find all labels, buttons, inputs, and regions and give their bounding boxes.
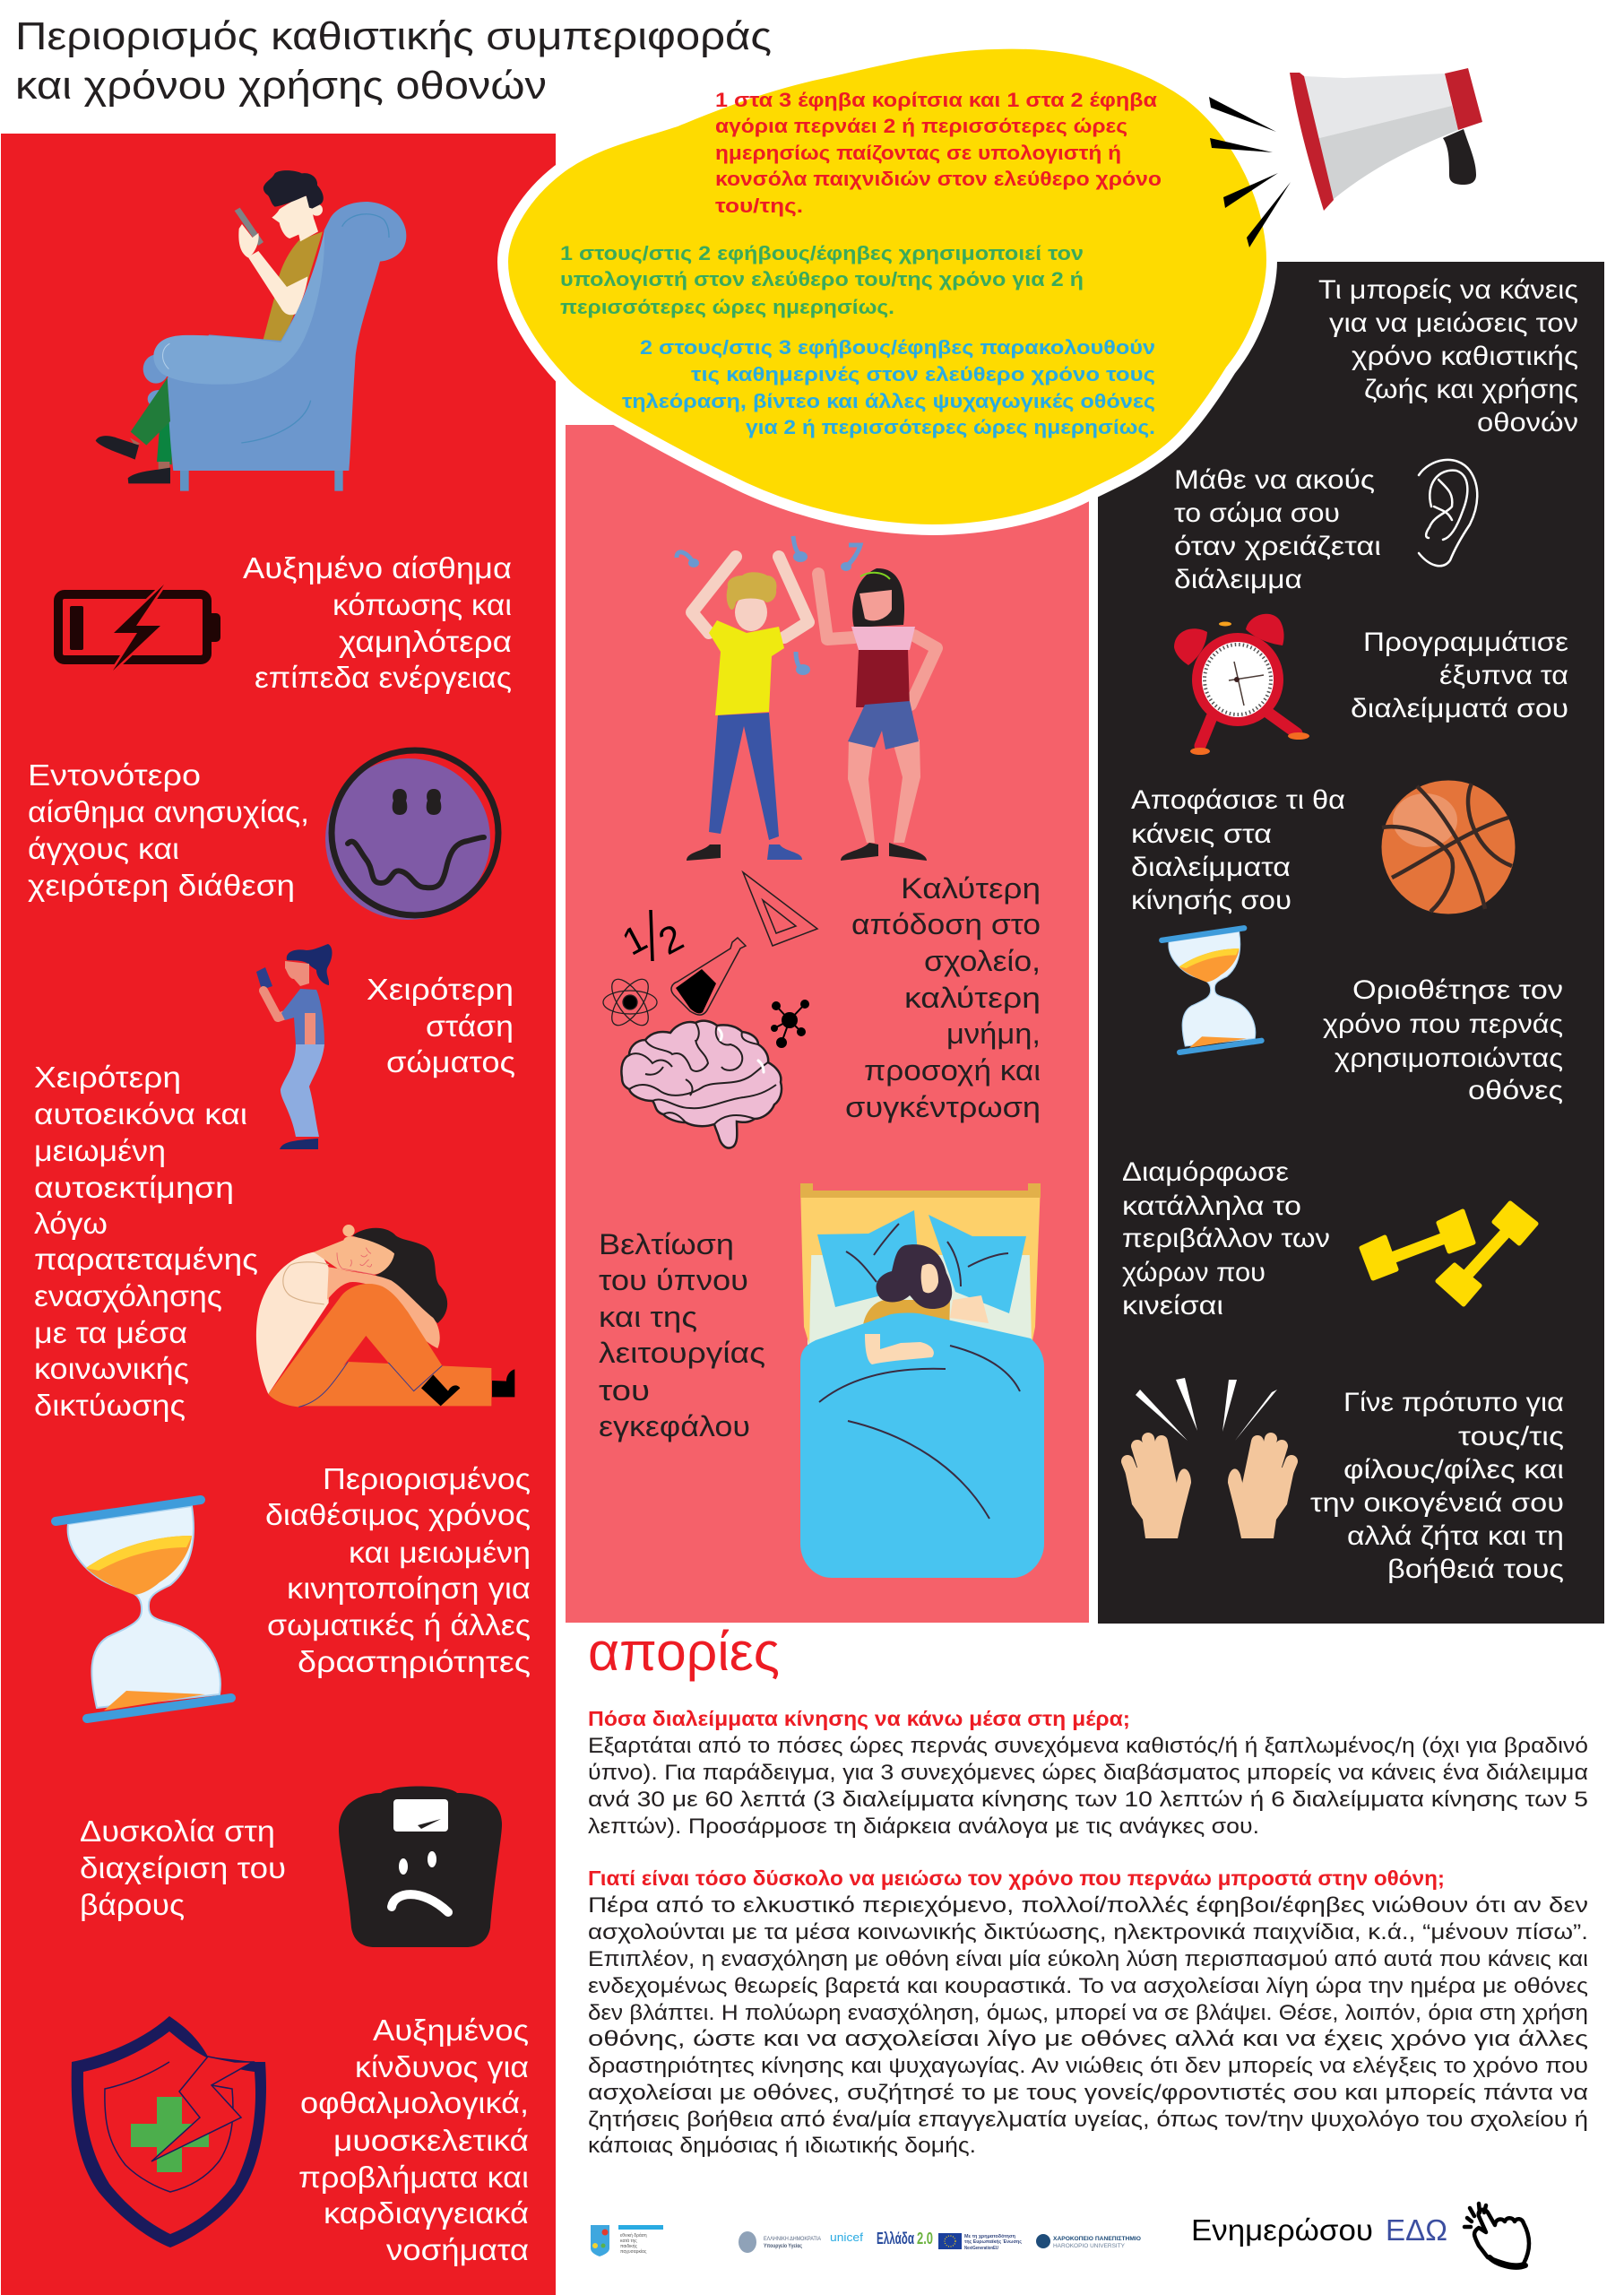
text: red stat: ημερησίως παίζοντας σε υπολογιστή ή bbox=[715, 142, 1121, 164]
icon: sad girl hugging knees bbox=[256, 1225, 514, 1407]
text: posture: Χειρότερη bbox=[367, 973, 514, 1006]
text: listen to body: διάλειμμα bbox=[1174, 565, 1302, 594]
icon: hourglass bbox=[56, 1500, 231, 1719]
text: school performance: προσοχή και bbox=[864, 1054, 1041, 1087]
text: posture: στάση bbox=[426, 1009, 514, 1043]
text: program breaks: Προγραμμάτισε bbox=[1363, 628, 1568, 657]
text: self image: λόγω bbox=[34, 1207, 108, 1240]
icon: sad bathroom scale bbox=[339, 1786, 502, 1947]
text: school performance bbox=[845, 872, 1041, 1123]
text: environment: κινείσαι bbox=[1122, 1291, 1223, 1321]
fraction one half: 1 bbox=[616, 916, 653, 964]
logo: European Union: της Ευρωπαϊκής Ένωσης bbox=[964, 2239, 1022, 2245]
icon: megaphone bbox=[1209, 68, 1482, 247]
logo: national action: εθνική δράση bbox=[620, 2232, 647, 2239]
text: self image: κοινωνικής bbox=[34, 1352, 189, 1385]
text: decide movement: Αποφάσισε τι θα bbox=[1131, 785, 1345, 815]
icon: low battery bbox=[58, 585, 220, 671]
text: fatigue: επίπεδα ενέργειας bbox=[255, 661, 512, 694]
text block: screen time question: ασχολούνται με τα μέσα κοινωνικής δικτύωσης, ηλεκτρονικά παιχνίδια, κ.ά., “μένουν πίσω”. bbox=[588, 1920, 1588, 1944]
text: anxiety: χειρότερη διάθεση bbox=[28, 869, 295, 902]
logo: European Union: Με τη χρηματοδότηση bbox=[964, 2234, 1016, 2239]
text: role model bbox=[1310, 1388, 1564, 1584]
text: decide movement bbox=[1131, 785, 1345, 915]
text: listen to body: το σώμα σου bbox=[1174, 498, 1340, 528]
text: green stat: υπολογιστή στον ελεύθερο του/της χρόνο για 2 ή bbox=[560, 268, 1084, 290]
text block: movement breaks question: ανά 30 με 60 λεπτά (3 διαλείμματα κίνησης των 10 λεπτών ή 6 διαλείμματα κίνησης των 5 bbox=[588, 1788, 1588, 1812]
text block: screen time question: ενδεχομένως θεωρείς βαρετά και κουραστικά. Το να ασχολείσαι λίγη ώρα την ημέρα με οθόνες bbox=[588, 1974, 1588, 1998]
text: school performance: καλύτερη bbox=[904, 982, 1041, 1014]
red panel background bbox=[1, 134, 556, 2295]
heading: questions: απορίες bbox=[588, 1622, 780, 1682]
icon: wobbly purple face bbox=[325, 750, 498, 920]
text: role model: βοήθειά τους bbox=[1387, 1555, 1564, 1584]
panel: what you can do bbox=[1098, 262, 1604, 1624]
text: school performance: σχολείο, bbox=[924, 945, 1041, 977]
text: anxiety: Εντονότερο bbox=[28, 758, 201, 792]
text: self image: με τα μέσα bbox=[34, 1316, 187, 1349]
text: school performance: απόδοση στο bbox=[851, 908, 1041, 940]
text: listen to body: όταν χρειάζεται bbox=[1174, 532, 1381, 561]
left hand bbox=[1124, 1439, 1191, 1538]
call to action: ΕΔΩ bbox=[1386, 2213, 1447, 2247]
text: fatigue: Αυξημένο αίσθημα bbox=[243, 551, 512, 585]
logo: national action: κατά της bbox=[620, 2238, 637, 2244]
text: environment: περιβάλλον των bbox=[1122, 1224, 1330, 1253]
text: decide movement: κίνησής σου bbox=[1131, 886, 1291, 915]
text: environment: κατάλληλα το bbox=[1122, 1191, 1301, 1221]
text: heading: ζωής και χρήσης bbox=[1364, 375, 1578, 404]
text: self image: αυτοεκτίμηση bbox=[34, 1171, 234, 1204]
text: health risk: προβλήματα και bbox=[298, 2161, 529, 2194]
text: fatigue: χαμηλότερα bbox=[339, 625, 512, 658]
icon: school science items bbox=[603, 872, 817, 1148]
text: weight: βάρους bbox=[80, 1888, 185, 1921]
text block: movement breaks question bbox=[588, 1707, 1588, 1839]
text: school performance: Καλύτερη bbox=[901, 872, 1041, 905]
text: anxiety: άγχους και bbox=[28, 832, 179, 865]
title: Περιορισμός καθιστικής συμπεριφοράς bbox=[15, 14, 772, 58]
logo: national action: παχυσαρκίας bbox=[620, 2249, 647, 2255]
atom bbox=[603, 974, 657, 1031]
logo: national action: παιδικής bbox=[620, 2243, 638, 2249]
text: heading: Τι μπορείς να κάνεις bbox=[1318, 275, 1578, 305]
text: limited time: δραστηριότητες bbox=[298, 1645, 531, 1678]
text block: screen time question: ασχολείσαι με οθόνες, συζήτησέ το με τους γονείς/φροντιστές σου και μπορείς πάντα να bbox=[588, 2081, 1588, 2105]
icon: pointing hand bbox=[1464, 2204, 1529, 2267]
text: blue stat bbox=[622, 336, 1155, 438]
logo: unicef: unicef bbox=[830, 2230, 863, 2244]
text: sleep: του bbox=[599, 1374, 650, 1407]
text: limit screen time: Οριοθέτησε τον bbox=[1352, 975, 1563, 1005]
text: sleep: του ύπνου bbox=[599, 1264, 748, 1296]
text: limit screen time bbox=[1323, 975, 1563, 1105]
panel: benefits bbox=[566, 425, 1089, 1623]
text: self image: μειωμένη bbox=[34, 1134, 166, 1167]
text: self image: Χειρότερη bbox=[34, 1061, 181, 1094]
logo: hellenic republic ministry of health: ΕΛΛΗΝΙΚΗ ΔΗΜΟΚΡΑΤΙΑ bbox=[764, 2237, 821, 2242]
text: sleep: εγκεφάλου bbox=[599, 1410, 750, 1442]
text: limited time: και μειωμένη bbox=[349, 1536, 531, 1569]
text: health risk: κίνδυνος για bbox=[355, 2050, 529, 2083]
bubble shape bbox=[503, 44, 1272, 530]
icon: teen on phone in armchair bbox=[96, 170, 406, 491]
text: role model: τους/τις bbox=[1458, 1422, 1564, 1451]
text block: screen time question bbox=[588, 1866, 1588, 2158]
icon: basketball bbox=[1382, 780, 1515, 914]
text: anxiety bbox=[28, 758, 309, 902]
text: health risk: Αυξημένος bbox=[373, 2014, 529, 2047]
text: decide movement: διαλείμματα bbox=[1131, 853, 1291, 882]
text: limit screen time: οθόνες bbox=[1468, 1076, 1563, 1105]
text: environment: Διαμόρφωσε bbox=[1122, 1157, 1289, 1187]
text: limited time: διαθέσιμος χρόνος bbox=[265, 1498, 531, 1531]
text: heading bbox=[1318, 275, 1578, 437]
call to action: Ενημερώσου bbox=[1191, 2213, 1373, 2247]
title: και χρόνου χρήσης οθονών bbox=[15, 64, 547, 108]
pink panel background bbox=[566, 425, 1089, 1623]
text: self image: παρατεταμένης bbox=[34, 1243, 258, 1276]
text: weight: Δυσκολία στη bbox=[80, 1814, 275, 1848]
text block: screen time question: δεν βλάπτει. Η πολύωρη ενασχόληση, όμως, μπορεί να σε βλάψει. Θέσε, λοιπόν, όρια στη χρήση bbox=[588, 2001, 1588, 2025]
text: limit screen time: χρόνο που περνάς bbox=[1323, 1009, 1563, 1039]
set square bbox=[743, 872, 817, 946]
text: role model: την οικογένειά σου bbox=[1310, 1488, 1564, 1518]
text: self image: δικτύωσης bbox=[34, 1389, 186, 1422]
text block: screen time question: Πέρα από το ελκυστικό περιεχόμενο, πολλοί/πολλές έφηβοι/έφηβες νιώθουν ότι αν δεν bbox=[588, 1893, 1588, 1918]
text: limited time: Περιορισμένος bbox=[323, 1462, 531, 1495]
text: decide movement: κάνεις στα bbox=[1131, 819, 1272, 849]
text: heading: χρόνο καθιστικής bbox=[1352, 342, 1578, 371]
text: self image: ενασχόλησης bbox=[34, 1279, 222, 1312]
text: program breaks bbox=[1351, 628, 1568, 723]
icon: girl sleeping in bed bbox=[800, 1183, 1044, 1578]
text: blue stat: για 2 ή περισσότερες ώρες ημερησίως. bbox=[746, 416, 1155, 438]
text block: movement breaks question: Εξαρτάται από το πόσες ώρες περνάς συνεχόμενα καθιστός/ή ή ξαπλωμένος/η (όχι για βραδινό bbox=[588, 1734, 1588, 1758]
text: self image bbox=[34, 1061, 258, 1422]
text: listen to body bbox=[1174, 465, 1381, 594]
text: green stat: περισσότερες ώρες ημερησίως. bbox=[560, 296, 894, 318]
text: limited time bbox=[265, 1462, 531, 1678]
text block: screen time question: κάποιας δημόσιας ή ιδιωτικής δομής. bbox=[588, 2134, 976, 2158]
icon: yellow dumbbells bbox=[1361, 1203, 1536, 1304]
text: health risk bbox=[298, 2014, 529, 2266]
text: heading: για να μειώσεις τον bbox=[1329, 308, 1578, 338]
logo: Harokopio University: ΧΑΡΟΚΟΠΕΙΟ ΠΑΝΕΠΙΣΤΗΜΙΟ bbox=[1053, 2236, 1141, 2242]
text: sleep: λειτουργίας bbox=[599, 1337, 765, 1369]
icon: broken health shield bbox=[72, 2016, 266, 2247]
text: blue stat: τις καθημερινές στον ελεύθερο χρόνο τους bbox=[691, 363, 1155, 385]
text block: movement breaks question: Πόσα διαλείμματα κίνησης να κάνω μέσα στη μέρα; bbox=[588, 1707, 1130, 1730]
fraction one half: 2 bbox=[652, 915, 690, 963]
text: fatigue bbox=[243, 551, 512, 694]
text: weight: διαχείριση του bbox=[80, 1851, 286, 1884]
text: health risk: οφθαλμολογικά, bbox=[300, 2086, 529, 2119]
clap rays bbox=[1136, 1378, 1277, 1441]
icon: small hourglass bbox=[1162, 928, 1262, 1052]
text: posture: σώματος bbox=[386, 1045, 515, 1078]
text: weight bbox=[80, 1814, 286, 1921]
text: green stat bbox=[560, 242, 1084, 318]
text: fatigue: κόπωσης και bbox=[333, 588, 512, 621]
text: health risk: νοσήματα bbox=[386, 2233, 529, 2266]
text: health risk: καρδιαγγειακά bbox=[324, 2196, 529, 2230]
text: red stat: 1 στα 3 έφηβα κορίτσια και 1 στα 2 έφηβα bbox=[715, 89, 1157, 111]
brain bbox=[621, 1021, 782, 1148]
logo: Harokopio University: HAROKOPIO UNIVERSITY bbox=[1053, 2243, 1126, 2249]
right hand bbox=[1228, 1439, 1295, 1538]
call to action bbox=[1191, 2204, 1529, 2267]
logo: Greece 2.0: 2.0 bbox=[917, 2230, 933, 2247]
text: blue stat: τηλεόραση, βίντεο και άλλες ψυχαγωγικές οθόνες bbox=[622, 390, 1155, 412]
panel: negative effects bbox=[1, 134, 556, 2295]
text: posture bbox=[367, 973, 515, 1078]
logo: hellenic republic ministry of health bbox=[739, 2231, 821, 2253]
speech bubble bbox=[503, 44, 1272, 530]
text: program breaks: διαλείμματά σου bbox=[1351, 694, 1568, 723]
text: red stat: αγόρια περνάει 2 ή περισσότερες ώρες bbox=[715, 115, 1127, 137]
icon: dancing teens bbox=[677, 536, 937, 861]
text block: movement breaks question: ύπνο). Για παράδειγμα, για 3 συνεχόμενες ώρες διαβάσματος μπορείς να κάνεις ένα διάλειμμα bbox=[588, 1761, 1588, 1785]
text: red stat: κονσόλα παιχνιδιών στον ελεύθερο χρόνο bbox=[715, 168, 1162, 190]
text: self image: αυτοεικόνα και bbox=[34, 1097, 247, 1130]
flask bbox=[671, 938, 746, 1015]
sound rays bbox=[1209, 97, 1291, 247]
text: red stat bbox=[715, 89, 1162, 217]
text block: movement breaks question: λεπτών). Προσάρμοσε τη διάρκεια ανάλογα με τις ανάγκες σου. bbox=[588, 1814, 1259, 1839]
text: sleep: Βελτίωση bbox=[599, 1228, 734, 1260]
text: limited time: σωματικές ή άλλες bbox=[267, 1608, 531, 1641]
logo: European Union: NextGenerationEU bbox=[964, 2246, 998, 2251]
text: green stat: 1 στους/στις 2 εφήβους/έφηβες χρησιμοποιεί τον bbox=[560, 242, 1084, 264]
text: sleep: και της bbox=[599, 1301, 697, 1333]
text: role model: αλλά ζήτα και τη bbox=[1347, 1521, 1564, 1551]
fraction one half bbox=[616, 910, 690, 964]
text: health risk: μυοσκελετικά bbox=[333, 2124, 529, 2157]
icon: ear bbox=[1419, 460, 1477, 566]
title bbox=[15, 14, 772, 108]
icon: clapping hands bbox=[1124, 1378, 1295, 1538]
text: role model: Γίνε πρότυπο για bbox=[1343, 1388, 1564, 1417]
text: limited time: κινητοποίηση για bbox=[287, 1572, 531, 1605]
icon: alarm clock bbox=[1174, 614, 1309, 755]
text: school performance: μνήμη, bbox=[946, 1018, 1041, 1050]
text block: screen time question: δραστηριότητες κίνησης και ψυχαγωγίας. Αν νιώθεις ότι δεν μπορείς να ελέγξεις το χρόνο που bbox=[588, 2054, 1588, 2078]
text block: screen time question: Επιπλέον, η ενασχόληση με οθόνη είναι μία εύκολη λύση περισπασμού από αυτά που κάνεις και bbox=[588, 1947, 1588, 1971]
text: environment: χώρων που bbox=[1122, 1258, 1266, 1287]
text: sleep bbox=[599, 1228, 765, 1442]
text block: screen time question: οθόνης, ώστε και να ασχολείσαι λίγο με οθόνες αλλά και να έχεις χρόνο για άλλες bbox=[588, 2027, 1588, 2051]
text: program breaks: έξυπνα τα bbox=[1439, 661, 1568, 690]
text: school performance: συγκέντρωση bbox=[845, 1091, 1041, 1123]
text block: screen time question: Γιατί είναι τόσο δύσκολο να μειώσω τον χρόνο που περνάω μπροστά στην οθόνη; bbox=[588, 1866, 1445, 1890]
text: heading: οθονών bbox=[1477, 408, 1578, 437]
text: role model: φίλους/φίλες και bbox=[1343, 1455, 1564, 1485]
black panel background bbox=[1098, 262, 1604, 1624]
text block: screen time question: ζητήσεις βοήθεια από ένα/μία επαγγελματία υγείας, όπως τον/την ψυχολόγο του σχολείου ή bbox=[588, 2108, 1588, 2132]
logo: European Union bbox=[938, 2233, 1022, 2251]
text: environment bbox=[1122, 1157, 1330, 1321]
logo: Harokopio University bbox=[1036, 2234, 1141, 2249]
logo: hellenic republic ministry of health: Υπουργείο Υγείας bbox=[764, 2244, 802, 2249]
text: listen to body: Μάθε να ακούς bbox=[1174, 465, 1375, 495]
footer logos bbox=[591, 2225, 1141, 2256]
molecule bbox=[772, 1000, 808, 1047]
logo: Greece 2.0: Ελλάδα bbox=[877, 2230, 914, 2247]
text: anxiety: αίσθημα ανησυχίας, bbox=[28, 795, 309, 828]
icon: girl with bad posture using phone bbox=[256, 944, 332, 1149]
text: limit screen time: χρησιμοποιώντας bbox=[1335, 1044, 1563, 1073]
text: red stat: του/της. bbox=[715, 195, 803, 217]
logo: national action bbox=[591, 2225, 663, 2256]
text: blue stat: 2 στους/στις 3 εφήβους/έφηβες παρακολουθούν bbox=[640, 336, 1155, 359]
